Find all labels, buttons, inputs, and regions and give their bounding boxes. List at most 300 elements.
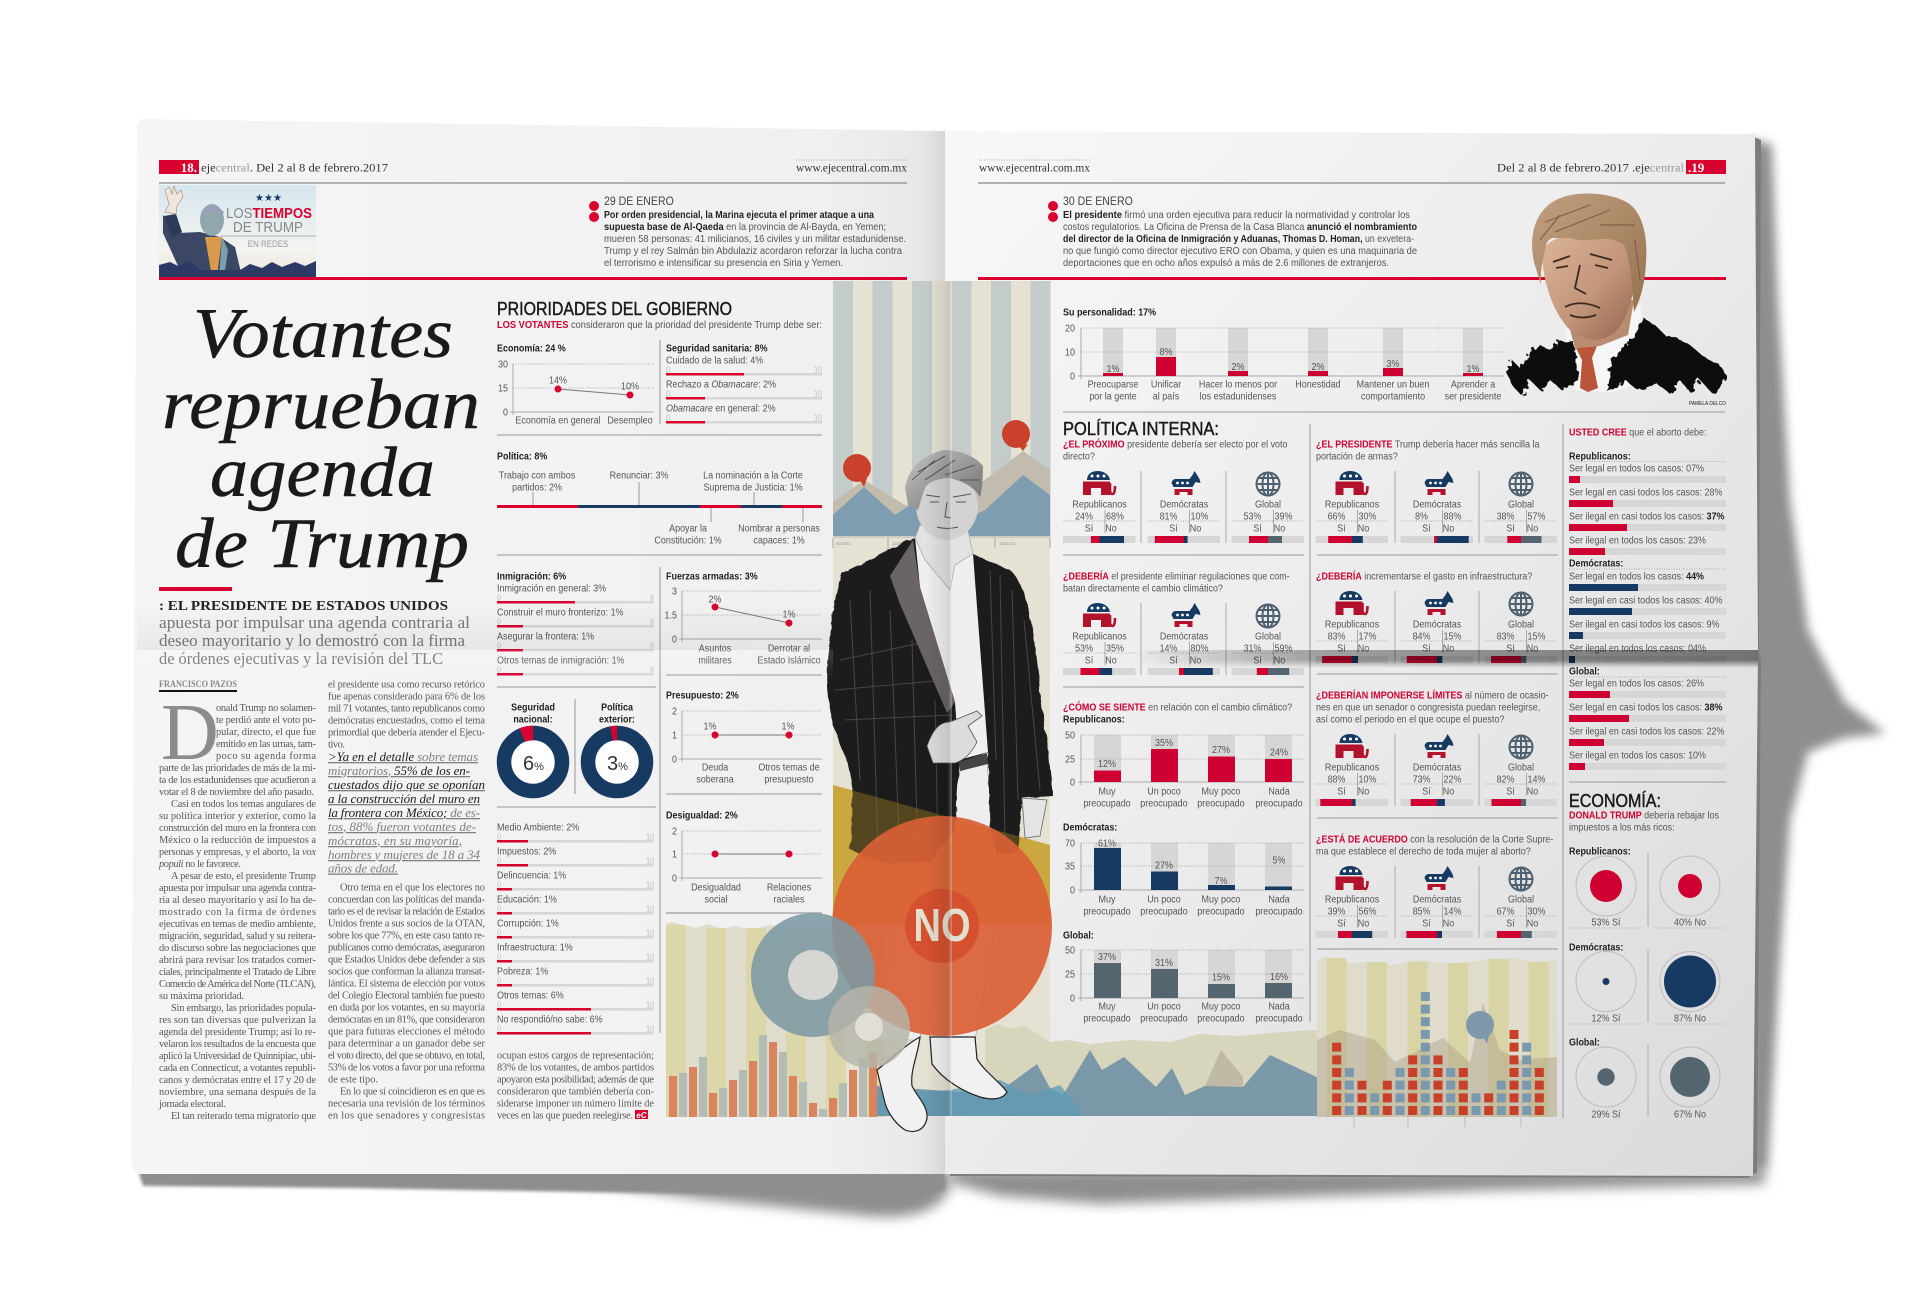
- poll column: Demócratas: 14%: [1160, 643, 1178, 655]
- poll column: Republicanos: Republicanos: [1325, 499, 1379, 511]
- article column 1: Comercio de América del Norte (TLCAN),: [159, 979, 316, 990]
- poll column: Republicanos: No: [1358, 918, 1369, 930]
- article column 2: demócratas encuestados, como el tema: [328, 716, 485, 726]
- poll column: Global: Global: [1508, 619, 1534, 631]
- line chart: Economía 24%: 30: [498, 359, 508, 371]
- ticks: [1354, 1117, 1521, 1127]
- bar chart: Demócratas: preocupado: [1083, 906, 1131, 918]
- translucent yellow wedge: [833, 785, 1050, 925]
- question: cambio climático regulaciones: [1063, 570, 1304, 675]
- donut: Seguridad nacional 6%: nacional:: [513, 714, 553, 726]
- left red rule: [159, 277, 907, 280]
- bar chart: Su personalidad 17%: 10: [1065, 347, 1075, 359]
- article column 2: tivo.: [328, 740, 345, 750]
- binary tick strip: 1100101: [999, 541, 1016, 546]
- bar chart: Republicanos: 24%: [1270, 747, 1288, 759]
- bars: Inmigración 6%: 6: [650, 641, 654, 651]
- poll column: Republicanos: No: [1358, 786, 1369, 798]
- bars: Republicanos: Ser legal en casi todos los casos: 28%: [1569, 487, 1723, 499]
- line chart: Fuerzas armadas 3%: 1%: [783, 609, 796, 621]
- bubbles: Demócratas: 87% No: [1674, 1013, 1706, 1025]
- bars: other priorities: 10: [646, 928, 654, 938]
- poll column: Republicanos: 53%: [1075, 643, 1093, 655]
- bar chart: Global: Muy poco: [1202, 1001, 1240, 1013]
- poll column: Demócratas: Sí: [1169, 655, 1178, 667]
- line chart: Desigualdad 2%: 2: [672, 826, 677, 838]
- left page: [131, 119, 945, 1174]
- timeline: 29 de enero: supuesta base de Al-Qaeda en la provincia de Al-Bayda, en Yemen;: [604, 222, 886, 233]
- article column 2: [328, 680, 486, 1122]
- mountains with speech bubbles: [833, 420, 1050, 537]
- article column 1: votar el 8 de noviembre del año pasado.: [159, 787, 314, 798]
- bars: other priorities: Pobreza: 1%: [497, 966, 549, 978]
- line chart: Fuerzas armadas 3%: 0: [672, 634, 677, 646]
- article column 1: mostrado con la firma de órdenes: [159, 907, 316, 918]
- bars: Seguridad sanitaria 8%: Cuidado de la salud: 4%: [666, 355, 764, 367]
- line chart: Economía 24%: 14%: [549, 375, 567, 387]
- poll column: Republicanos: 24%: [1075, 511, 1093, 523]
- article column 1: su política interior y exterior, como la: [159, 811, 316, 822]
- bars: Republicanos: Republicanos:: [1569, 451, 1631, 463]
- poll column: Republicanos: [1316, 866, 1388, 938]
- bubbles: Global: [1569, 1037, 1720, 1121]
- byline: FRANCISCO PAZOS: [159, 679, 237, 689]
- poll column: Global: [1484, 592, 1557, 663]
- poll column: Demócratas: [1400, 591, 1473, 663]
- pull quote: mócratas, en su mayoría,: [328, 833, 462, 848]
- question: límites de reelección: nes en que un senador o congresista puedan reelegirse,: [1316, 702, 1540, 714]
- bars: other priorities: 10: [646, 832, 654, 842]
- bubbles: Global: 67% No: [1674, 1109, 1706, 1121]
- bubbles: Demócratas: 12% Sí: [1592, 1013, 1621, 1025]
- bar chart: Su personalidad 17%: Honestidad: [1295, 379, 1341, 391]
- poll column: Global: Sí: [1253, 523, 1262, 535]
- neck: [1562, 300, 1634, 348]
- bar chart: Global: [1063, 930, 1304, 1025]
- poll column: Demócratas: 14%: [1444, 906, 1462, 918]
- pull quote: migratorios, 55% de los en-: [328, 763, 470, 778]
- deck: apuesta por impulsar una agenda contraria al: [159, 613, 470, 632]
- los tiempos de trump badge: EN REDES: [248, 239, 289, 249]
- question: cambio climático regulaciones: batan directamente el cambio climático?: [1063, 583, 1223, 595]
- poll column: Global: [1484, 868, 1557, 938]
- bar chart: Su personalidad 17%: 3%: [1387, 359, 1400, 370]
- poll column: Demócratas: [1148, 603, 1220, 675]
- bar chart: Demócratas: 7%: [1215, 876, 1228, 887]
- poll column: Republicanos: [1063, 471, 1136, 543]
- poll column: Demócratas: [1148, 471, 1220, 543]
- bar chart: Demócratas: Muy poco: [1202, 894, 1240, 906]
- timeline: 30 de enero: costos regulatorios. La Oficina de Prensa de la Casa Blanca anunció el nombramiento: [1063, 222, 1417, 233]
- orange NO circle: NO: [914, 899, 970, 951]
- blue gray target circle: [751, 913, 875, 1037]
- blue callout: [1466, 1011, 1494, 1044]
- bars: Demócratas: Ser legal en todos los casos: 44%: [1569, 571, 1704, 583]
- poll column: Republicanos: [1316, 471, 1388, 543]
- bar chart: Su personalidad 17%: ser presidente: [1445, 391, 1501, 403]
- bars: Inmigración 6%: 0: [497, 665, 501, 675]
- article column 1: [158, 689, 317, 1122]
- poll column: Demócratas: 73%: [1413, 774, 1431, 786]
- pull quote: a la construcción del muro en: [328, 791, 480, 806]
- headline: Votantes: [193, 295, 453, 373]
- shirt: [915, 538, 988, 760]
- binary tick strip: 001001: [836, 541, 851, 546]
- poll column: Republicanos: 66%: [1328, 511, 1346, 523]
- bar chart: Su personalidad 17%: al país: [1153, 391, 1179, 403]
- white boots: [877, 1037, 1007, 1132]
- poll column: Republicanos: 39%: [1328, 906, 1346, 918]
- line chart: Fuerzas armadas 3%: 1.5: [665, 610, 677, 622]
- question: portación de armas: [1316, 439, 1557, 543]
- poll column: Republicanos: Sí: [1085, 655, 1094, 667]
- bar chart: Republicanos: 50: [1065, 730, 1075, 742]
- poll column: Global: No: [1527, 523, 1538, 535]
- line chart: Presupuesto 2%: 1%: [782, 721, 795, 733]
- bars: other priorities: 10: [646, 976, 654, 986]
- orange and gray bars: [669, 1035, 877, 1117]
- bars: other priorities: Otros temas: 6%: [497, 990, 564, 1002]
- segmented bar: Política 8%: Política: 8%: [497, 451, 548, 463]
- bar chart: Su personalidad 17%: 20: [1065, 323, 1075, 335]
- article column 2: primordial que debería atender el Ejecu-: [328, 728, 486, 738]
- line chart: Economía 24%: [497, 343, 654, 427]
- left page masthead: [159, 160, 907, 183]
- line chart: Economía 24%: Desempleo: [607, 415, 653, 427]
- article column 1: cada en Connecticut, a votantes republi-: [159, 1063, 317, 1074]
- heading: prioridades del gobierno: PRIORIDADES DEL GOBIERNO: [497, 298, 732, 319]
- black ink jacket: [1506, 318, 1726, 396]
- line chart: Presupuesto 2%: Otros temas de: [758, 762, 820, 774]
- pinstripes and hatching: [835, 570, 1040, 860]
- segmented bar: Política 8%: Nombrar a personas: [738, 523, 820, 535]
- poll column: Republicanos: No: [1358, 643, 1369, 655]
- poll column: Global: No: [1527, 643, 1538, 655]
- bar chart: Republicanos: Nada: [1268, 786, 1290, 798]
- bar chart: Su personalidad 17%: 0: [1070, 371, 1075, 383]
- illustration: central collage: [666, 281, 1327, 1132]
- article column 2: del Colegio Electoral también fue puesto: [328, 990, 485, 1002]
- poll column: Republicanos: 30%: [1359, 511, 1377, 523]
- donut: Seguridad nacional 6%: [495, 702, 571, 800]
- poll column: Global: Global: [1255, 631, 1281, 643]
- bar chart: Global: Muy: [1099, 1001, 1116, 1013]
- bars: Global: [1569, 666, 1726, 770]
- article column 1: Casi en todos los temas angulares de: [171, 799, 316, 810]
- bars: other priorities: 0: [497, 832, 501, 842]
- line chart: Presupuesto 2%: presupuesto: [764, 774, 814, 786]
- bar chart: Republicanos: Republicanos:: [1063, 714, 1125, 726]
- bars: Demócratas: Demócratas:: [1569, 558, 1623, 570]
- segmented bar: Política 8%: Renunciar: 3%: [610, 470, 669, 482]
- line chart: Presupuesto 2%: Deuda: [702, 762, 729, 774]
- bar chart: Demócratas: 61%: [1098, 838, 1116, 850]
- line chart: Desigualdad 2%: raciales: [774, 894, 805, 906]
- bars: Global: Ser legal en todos los casos: 26%: [1569, 678, 1704, 690]
- article column 2: mil 71 votantes, tanto republicanos como: [328, 704, 485, 714]
- bars: Inmigración 6%: Asegurar la frontera: 1%: [497, 631, 595, 643]
- poll column: Global: Global: [1255, 499, 1281, 511]
- article column 1: jornada electoral.: [158, 1099, 226, 1110]
- article column 2: publicanos como demócratas, aseguraron: [328, 942, 486, 954]
- timeline: 30 de enero: El presidente firmó una orden ejecutiva para reducir la normatividad y controlar los: [1063, 210, 1410, 221]
- bars: other priorities: 0: [497, 1024, 501, 1034]
- article column 2: el presidente usa como recurso retórico: [328, 680, 485, 690]
- article column 2: Unidos frente a sus socios de la OTAN,: [328, 918, 485, 930]
- poll column: Demócratas: No: [1443, 643, 1454, 655]
- poll column: Republicanos: Republicanos: [1325, 894, 1379, 906]
- poll column: Demócratas: 85%: [1413, 906, 1431, 918]
- timeline: 30 de enero: no que fungió como director ejecutivo ERO con Obama, y quien es una maquinaria de: [1063, 246, 1417, 257]
- right page masthead: .19: [1688, 160, 1705, 175]
- article column 1: ejecutivas en temas de medio ambiente,: [159, 919, 316, 930]
- bar chart: Republicanos: 27%: [1212, 745, 1230, 756]
- tie: [1576, 346, 1598, 392]
- right page masthead: [978, 160, 1726, 183]
- bar chart: Su personalidad 17%: Preocuparse: [1088, 379, 1138, 391]
- bubbles: Republicanos: 53% Sí: [1592, 917, 1621, 929]
- line chart: Fuerzas armadas 3%: 3: [672, 586, 677, 598]
- jacket: [827, 538, 1053, 864]
- bars: Global: Global:: [1569, 666, 1600, 678]
- bar chart: Global: 37%: [1098, 952, 1116, 963]
- divider: [659, 340, 661, 424]
- deck: : EL PRESIDENTE DE ESTADOS UNIDOS: [159, 599, 448, 614]
- tan mountains: [1317, 1003, 1557, 1117]
- poll column: Global: Sí: [1506, 523, 1515, 535]
- poll column: Republicanos: [1316, 591, 1388, 663]
- right page masthead: Del 2 al 8 de febrero.2017 .eje central: [1497, 162, 1684, 174]
- bar chart: Global: 31%: [1155, 958, 1173, 969]
- timeline: 30 de enero: deportaciones que en ocho años expulsó a más de 2.6 millones de extranjeros.: [1063, 258, 1389, 269]
- bars: Inmigración 6%: 6: [650, 665, 654, 675]
- poll column: Republicanos: 35%: [1106, 643, 1124, 655]
- orange NO circle: [832, 816, 1052, 1036]
- trousers: [875, 763, 1000, 1040]
- poll column: Demócratas: Demócratas: [1160, 631, 1208, 643]
- article column 3: apoyaron esta posibilidad; además de que: [497, 1074, 654, 1086]
- poll column: Global: 83%: [1497, 631, 1515, 643]
- bars: other priorities: Infraestructura: 1%: [497, 942, 573, 954]
- poll column: Global: 14%: [1528, 774, 1546, 786]
- article column 2: 53% de los votos a favor por una reforma: [328, 1062, 485, 1074]
- article column 2: En lo que sí coincidieron es en que es: [340, 1086, 485, 1098]
- line chart: Desigualdad 2%: 0: [672, 873, 677, 885]
- line chart: Fuerzas armadas 3%: 2%: [709, 594, 722, 606]
- segmented bar: Política 8%: La nominación a la Corte: [703, 470, 803, 482]
- article column 1: noviembre, una semana después de la: [159, 1087, 316, 1098]
- poll column: Global: 31%: [1244, 643, 1262, 655]
- poll column: Demócratas: 10%: [1191, 511, 1209, 523]
- question: voto directo: ¿EL PRÓXIMO presidente debería ser electo por el voto: [1063, 438, 1288, 451]
- poll column: Republicanos: Sí: [1085, 523, 1094, 535]
- poll column: Demócratas: Sí: [1422, 523, 1431, 535]
- line chart: Fuerzas armadas 3%: Asuntos: [699, 643, 731, 655]
- article column 2: lántica. El sistema de elección por votos: [328, 978, 485, 990]
- poll column: Demócratas: Sí: [1422, 786, 1431, 798]
- question: infraestructura: [1316, 570, 1557, 663]
- poll column: Global: No: [1274, 655, 1285, 667]
- bar chart: Su personalidad 17%: Su personalidad: 17%: [1063, 307, 1157, 319]
- poll column: Global: 53%: [1244, 511, 1262, 523]
- right red rule: [978, 277, 1726, 280]
- poll column: Global: No: [1527, 786, 1538, 798]
- line chart: Presupuesto 2%: 0: [672, 754, 677, 766]
- poll column: Demócratas: Demócratas: [1413, 619, 1461, 631]
- poll column: Global: 59%: [1275, 643, 1293, 655]
- bars: Seguridad sanitaria 8%: 10: [814, 365, 822, 375]
- line chart: Desigualdad 2%: social: [705, 894, 727, 906]
- panel: economía: DONALD TRUMP debería rebajar los: [1569, 810, 1719, 822]
- poll column: Demócratas: Sí: [1422, 918, 1431, 930]
- bars: other priorities: Educación: 1%: [497, 894, 557, 906]
- article column 2: para determinar a un ganador debe ser: [328, 1038, 486, 1050]
- article column 1: migración, seguridad, salud y su reitera-: [159, 931, 317, 942]
- bars: Seguridad sanitaria 8%: 0: [666, 389, 670, 399]
- bar chart: Global: Global:: [1063, 930, 1094, 942]
- blue squares: [1349, 992, 1527, 1115]
- segmented bar: Política 8%: Constitución: 1%: [654, 535, 722, 547]
- bar chart: Demócratas: [1063, 822, 1304, 918]
- poll column: Global: Sí: [1506, 643, 1515, 655]
- deck: deseo mayoritario y lo demostró con la firma: [159, 631, 466, 650]
- poll column: Republicanos: Republicanos: [1325, 619, 1379, 631]
- poll column: Demócratas: [1400, 734, 1473, 806]
- bars: Republicanos: Ser ilegal en todos los casos: 23%: [1569, 535, 1706, 547]
- bar chart: Republicanos: 12%: [1098, 759, 1116, 770]
- poll column: Demócratas: Demócratas: [1413, 499, 1461, 511]
- article column 2: de este tipo.: [328, 1074, 378, 1086]
- pull quote: >Ya en el detalle sobre temas: [328, 749, 478, 764]
- horizontal paper fold shading: [137, 634, 1758, 672]
- article column 1: do discurso sobre las negociaciones que: [159, 943, 316, 954]
- poll column: Global: 57%: [1528, 511, 1546, 523]
- belt: [959, 753, 988, 771]
- article column 2: sobre los que 77%, en este caso tanto re-: [328, 930, 486, 942]
- poll column: Global: 30%: [1528, 906, 1546, 918]
- newspaper spread: [131, 119, 1761, 1178]
- bar chart: Su personalidad 17%: Hacer lo menos por: [1199, 379, 1278, 391]
- poll column: Republicanos: Sí: [1337, 523, 1346, 535]
- bar chart: Republicanos: Muy: [1099, 786, 1116, 798]
- question: aborto: ma que establece el derecho de toda mujer al aborto?: [1316, 846, 1531, 858]
- article column 1: res son tan diversas que pulverizan la: [159, 1015, 316, 1026]
- question: voto directo: directo?: [1063, 451, 1095, 463]
- timeline: 30 de enero: del director de la Oficina de Inmigración y Aduanas, Thomas D. Homan, un exvetera-: [1063, 234, 1414, 245]
- binary tick strip: 110110: [892, 541, 906, 546]
- article column 1: poco su agenda forma: [216, 751, 316, 762]
- bar chart: Demócratas: Demócratas:: [1063, 822, 1117, 834]
- right page: [945, 131, 1758, 1176]
- question: infraestructura: ¿DEBERÍA incrementarse el gasto en infraestructura?: [1316, 570, 1532, 583]
- panel: usted cree que el aborto debe: USTED CREE que el aborto debe:: [1569, 427, 1707, 439]
- bubbles: Demócratas: Demócratas:: [1569, 942, 1623, 954]
- bar chart: Su personalidad 17%: 1%: [1107, 364, 1120, 375]
- poll column: Republicanos: Republicanos: [1325, 762, 1379, 774]
- hair: [905, 450, 983, 510]
- right page masthead: www.ejecentral.com.mx: [979, 162, 1090, 174]
- question: límites de reelección: así como el periodo en el que ocupe el puesto?: [1316, 714, 1504, 726]
- left page masthead: ejecentral . Del 2 al 8 de febrero.2017: [201, 162, 388, 174]
- bar chart: Demócratas: 27%: [1155, 860, 1173, 872]
- pull quote: cuestados dijo que se oponían: [328, 777, 485, 792]
- article column 1: pular, directo, el que fue: [216, 727, 316, 738]
- poll column: Demócratas: 22%: [1444, 774, 1462, 786]
- timeline: 29 de enero: Trump y el rey Salmán bin Abdulaziz acordaron reforzar la lucha contra: [604, 246, 902, 257]
- segmented bar: Política 8%: [497, 451, 822, 547]
- timeline: 29 de enero: [589, 195, 906, 269]
- article column 3: veces en las que pueden reelegirse.: [497, 1110, 633, 1122]
- bar chart: Global: preocupado: [1255, 1013, 1303, 1025]
- poll column: Republicanos: Sí: [1337, 786, 1346, 798]
- poll column: Global: No: [1274, 523, 1285, 535]
- question: aborto: [1316, 833, 1557, 938]
- bars: Seguridad sanitaria 8%: Obamacare en general: 2%: [666, 403, 776, 415]
- bars: Inmigración 6%: 6: [650, 593, 654, 603]
- left page masthead: www.ejecentral.com.mx: [796, 162, 907, 174]
- poll column: Republicanos: No: [1105, 523, 1117, 535]
- panel: economía: impuestos a los más ricos:: [1569, 822, 1675, 834]
- bar chart: Demócratas: Un poco: [1147, 894, 1181, 906]
- poll column: Demócratas: No: [1443, 918, 1454, 930]
- hand: [927, 711, 982, 763]
- timeline: 29 de enero: mueren 58 personas: 41 milicianos, 16 civiles y un militar estadunidense.: [604, 234, 906, 245]
- bar chart: Republicanos: 35%: [1155, 738, 1173, 749]
- poll column: Demócratas: No: [1443, 786, 1454, 798]
- line chart: Economía 24%: 10%: [621, 381, 639, 393]
- question: aborto: ¿ESTÁ DE ACUERDO con la resolución de la Corte Supre-: [1316, 833, 1553, 846]
- bar chart: Republicanos: 25: [1065, 754, 1075, 766]
- bar chart: Republicanos: Muy poco: [1202, 786, 1240, 798]
- timeline: 30 de enero: [1048, 195, 1417, 269]
- timeline: 29 de enero: el terrorismo e intensificar su presencia en Siria y Yemen.: [604, 258, 843, 269]
- poll column: Demócratas: 81%: [1160, 511, 1178, 523]
- poll column: Republicanos: 83%: [1328, 631, 1346, 643]
- timeline: 30 de enero: 30 DE ENERO: [1063, 195, 1133, 208]
- bars: Seguridad sanitaria 8%: 0: [666, 365, 670, 375]
- pull quote: años de edad.: [328, 860, 398, 876]
- badge stars: ★★★: [255, 193, 282, 204]
- bar chart: Global: 25: [1065, 969, 1075, 981]
- article column 2: tario es el de revisar la relación de Estados: [328, 906, 485, 918]
- panel: economía: [1569, 790, 1726, 1121]
- timeline: 29 de enero: Por orden presidencial, la Marina ejecuta el primer ataque a una: [604, 210, 874, 221]
- bar chart: Global: 50: [1065, 945, 1075, 957]
- lapel: [890, 540, 955, 713]
- poll column: Demócratas: 80%: [1191, 643, 1209, 655]
- right hand: [1022, 798, 1047, 838]
- poll column: Demócratas: 15%: [1444, 631, 1462, 643]
- pull quote: hombres y mujeres de 18 a 34: [328, 847, 480, 862]
- donut: Política exterior 3%: Política: [601, 702, 634, 714]
- article column 2: en los que senadores y congresistas: [328, 1110, 485, 1122]
- article column 1: canos y demócratas entre el 17 y 20 de: [159, 1075, 316, 1086]
- poll column: Republicanos: 56%: [1359, 906, 1377, 918]
- bars: Global: Ser legal en casi todos los casos: 38%: [1569, 702, 1723, 714]
- illustrator credit: PAMELA DELCO: [1689, 401, 1726, 407]
- bar chart: Republicanos: preocupado: [1255, 798, 1303, 810]
- gray target circle: [828, 986, 910, 1068]
- poll column: Republicanos: 68%: [1106, 511, 1124, 523]
- bars: Seguridad sanitaria 8%: Rechazo a Obamacare: 2%: [666, 379, 777, 391]
- bars: Inmigración 6%: Inmigración: 6%: [497, 571, 567, 583]
- bars: Demócratas: Ser ilegal en casi todos los casos: 9%: [1569, 619, 1720, 631]
- poll column: Global: Global: [1508, 499, 1534, 511]
- bars: Seguridad sanitaria 8%: [666, 343, 822, 424]
- poll column: Global: No: [1527, 918, 1538, 930]
- pull quote: tos, 88% fueron votantes de-: [328, 819, 476, 834]
- bars: Inmigración 6%: 0: [497, 593, 501, 603]
